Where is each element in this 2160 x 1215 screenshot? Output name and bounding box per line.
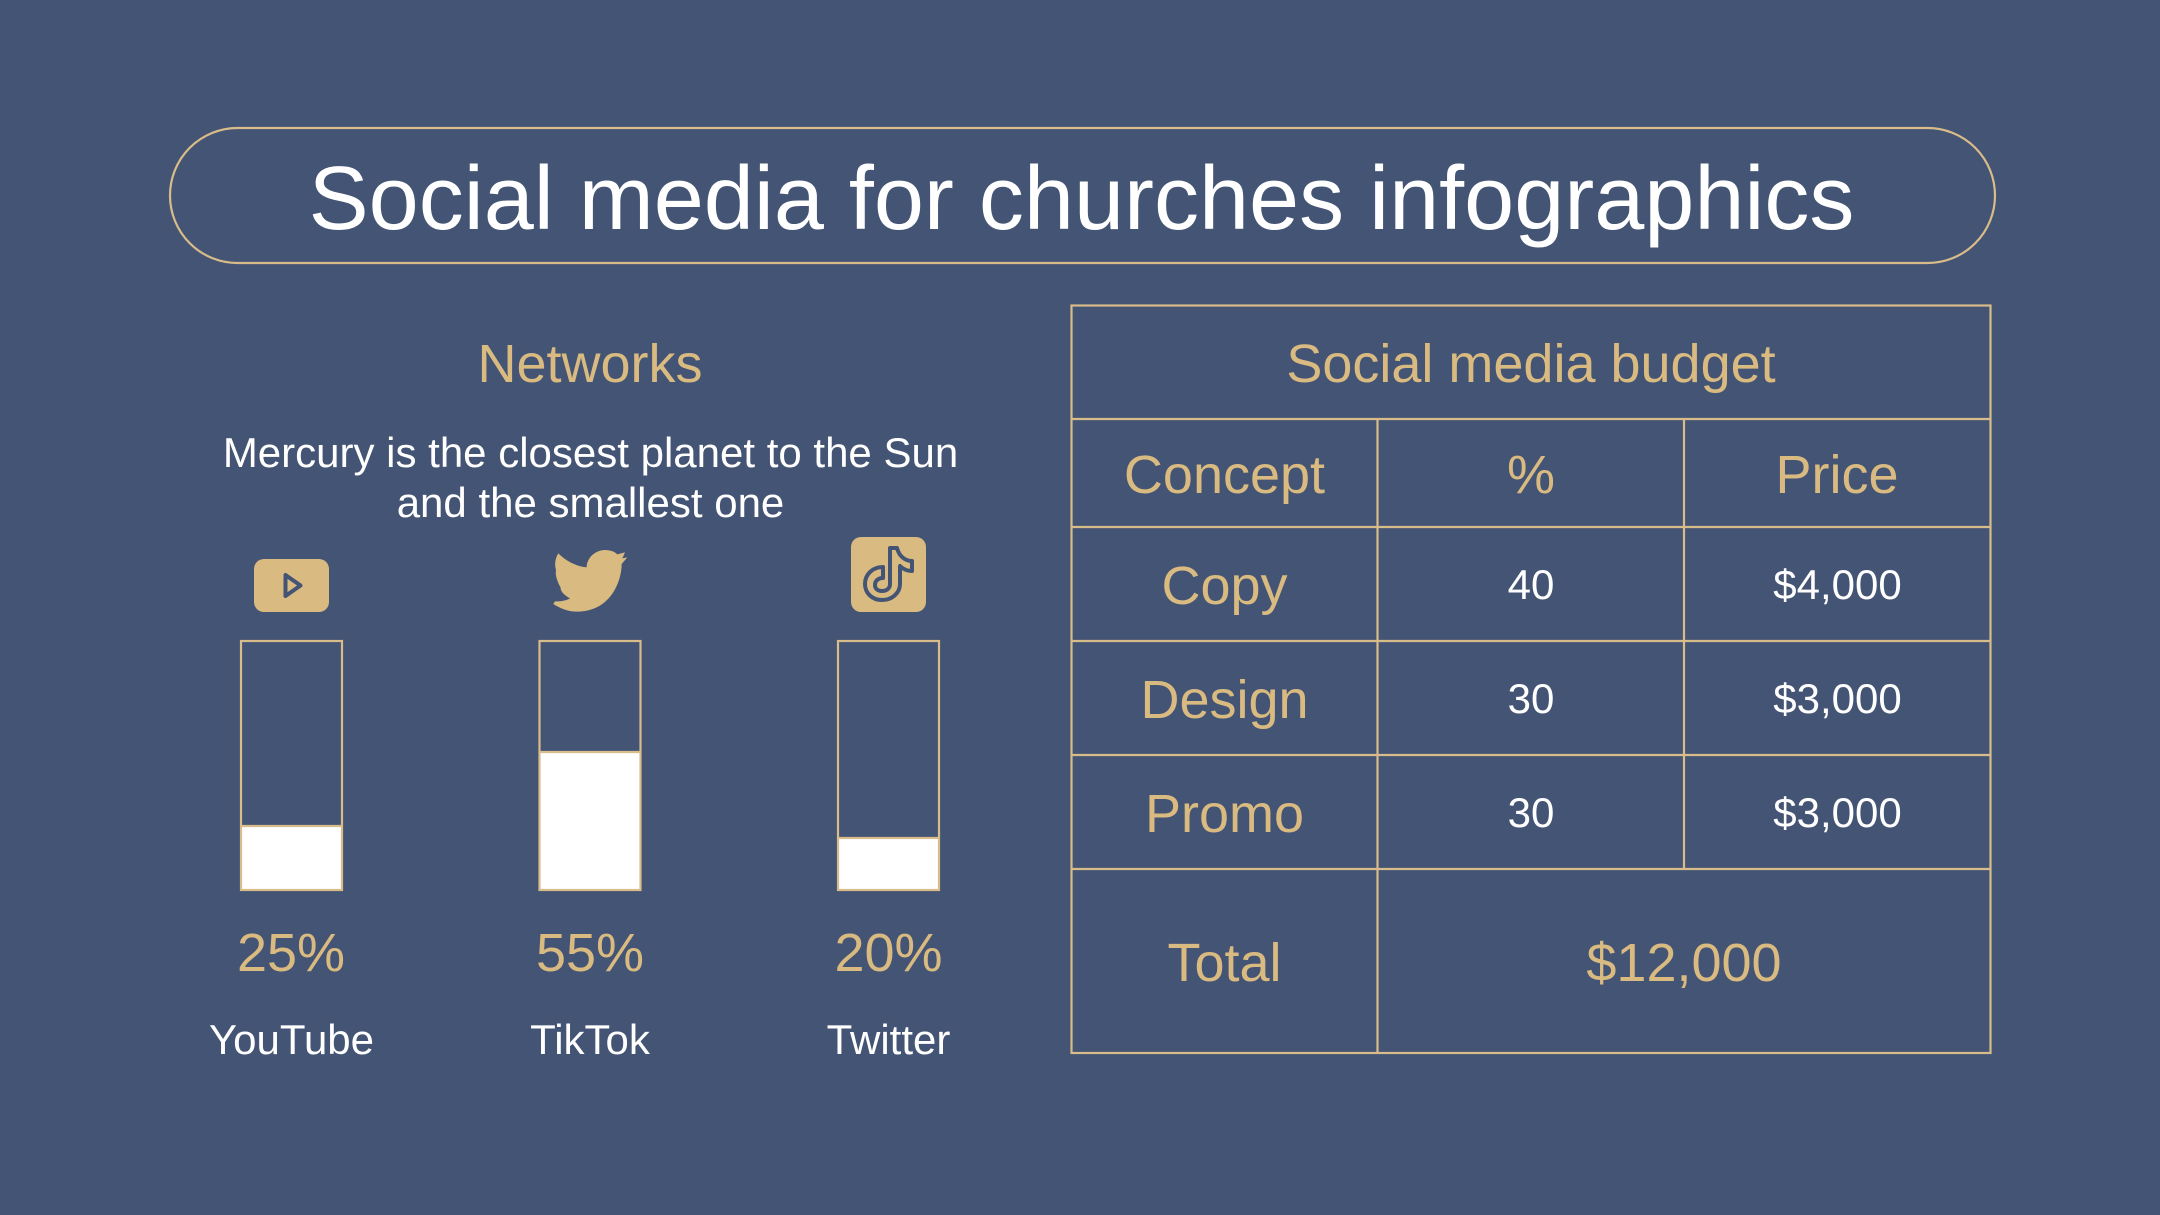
- row: total: Total: [1167, 933, 1282, 993]
- column header: percent: %: [1507, 445, 1555, 505]
- icon: video play: [254, 559, 329, 612]
- networks heading: Networks: [477, 334, 703, 394]
- row: design: Design: [1140, 670, 1309, 730]
- row: promo: Promo: [1145, 784, 1304, 844]
- bar: youtube 25%: [241, 641, 342, 890]
- value: twitter: 20%: [834, 923, 943, 983]
- value: youtube: 25%: [237, 923, 345, 983]
- title pill: [170, 128, 1995, 263]
- row: copy: $4,000: [1773, 561, 1902, 608]
- row: copy: Copy: [1161, 556, 1288, 616]
- row: design: $3,000: [1773, 675, 1902, 722]
- icon: tiktok note: [851, 537, 926, 612]
- row: design: 30: [1508, 675, 1554, 722]
- label: tiktok: TikTok: [530, 1016, 651, 1063]
- networks description: and the smallest one: [397, 479, 784, 526]
- row: promo: $3,000: [1773, 789, 1902, 836]
- label: youtube: YouTube: [209, 1016, 374, 1063]
- networks description: Mercury is the closest planet to the Sun: [223, 429, 958, 476]
- table grid: [1072, 306, 1990, 1053]
- panel: networks: [209, 334, 958, 1063]
- row: copy: 40: [1508, 561, 1554, 608]
- icon: twitter bird: [553, 550, 627, 612]
- row: copy: [1161, 556, 1902, 616]
- row: promo: 30: [1508, 789, 1554, 836]
- row: total: $12,000: [1586, 933, 1782, 993]
- title pill: Social media for churches infographics: [309, 149, 1854, 249]
- row: design: [1140, 670, 1902, 730]
- row: promo: [1145, 784, 1902, 844]
- label: twitter: Twitter: [827, 1016, 950, 1063]
- column header: price: Price: [1775, 445, 1899, 505]
- table heading: Social media budget: [1286, 334, 1776, 394]
- bar: tiktok 55%: [540, 641, 640, 890]
- value: tiktok: 55%: [536, 923, 644, 983]
- bar: twitter 20%: [838, 641, 939, 890]
- panel: social media budget table: [1072, 306, 1990, 1053]
- row: total: [1167, 933, 1782, 993]
- column header: concept: Concept: [1124, 445, 1325, 505]
